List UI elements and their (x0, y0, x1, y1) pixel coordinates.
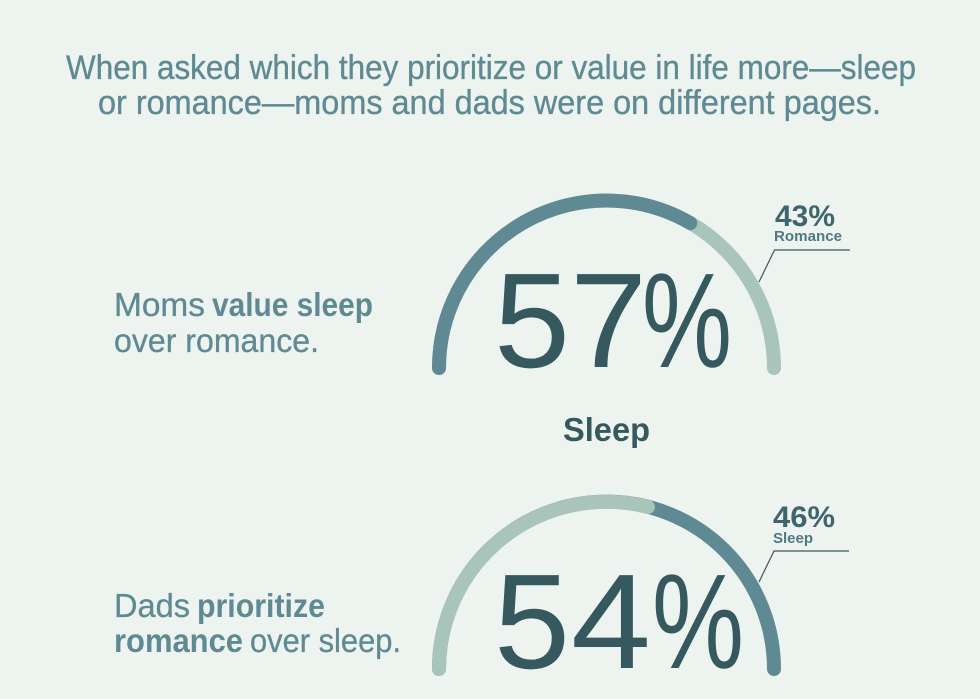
callout: 46% sleep (759, 501, 849, 582)
title: or romance—moms and dads were on different pages. (98, 84, 881, 122)
gauge: moms 57% sleep, 43% romance (439, 201, 774, 368)
gauge: dads 54% romance, 46% sleep (439, 502, 774, 669)
label: sleep: Sleep (563, 411, 650, 448)
text block: dads statement: over sleep. (250, 622, 401, 659)
text block: moms statement (114, 286, 373, 359)
text block: dads statement: Dads (114, 587, 190, 624)
text block: dads statement: prioritize (197, 587, 325, 624)
text block: moms statement: value sleep (212, 286, 373, 323)
callout: 46% sleep: 46% (773, 501, 835, 534)
title: When asked which they prioritize or value in life more—sleep (66, 49, 916, 87)
panel: dads (114, 501, 849, 697)
text block: dads statement (114, 587, 401, 659)
callout: 43% romance (759, 200, 850, 282)
big number: 54%: 4 (571, 546, 651, 697)
big number: 54%: 5 (494, 546, 570, 697)
title (66, 49, 916, 122)
big number: 57%: 5 (494, 245, 570, 396)
big number: 57%: 7 (570, 245, 647, 396)
text block: dads statement: romance (114, 622, 243, 659)
big number: 54%: % (652, 546, 744, 697)
text block: moms statement: Moms (114, 286, 205, 323)
big number: 54% (494, 546, 744, 697)
callout: 43% romance: 43% (775, 200, 835, 233)
big number: 57%: % (642, 245, 732, 396)
text block: moms statement: over romance. (114, 322, 319, 359)
panel: moms (114, 200, 850, 448)
callout: 43% romance: Romance (774, 228, 842, 245)
callout: 46% sleep: Sleep (773, 530, 813, 547)
big number: 57% (494, 245, 732, 396)
